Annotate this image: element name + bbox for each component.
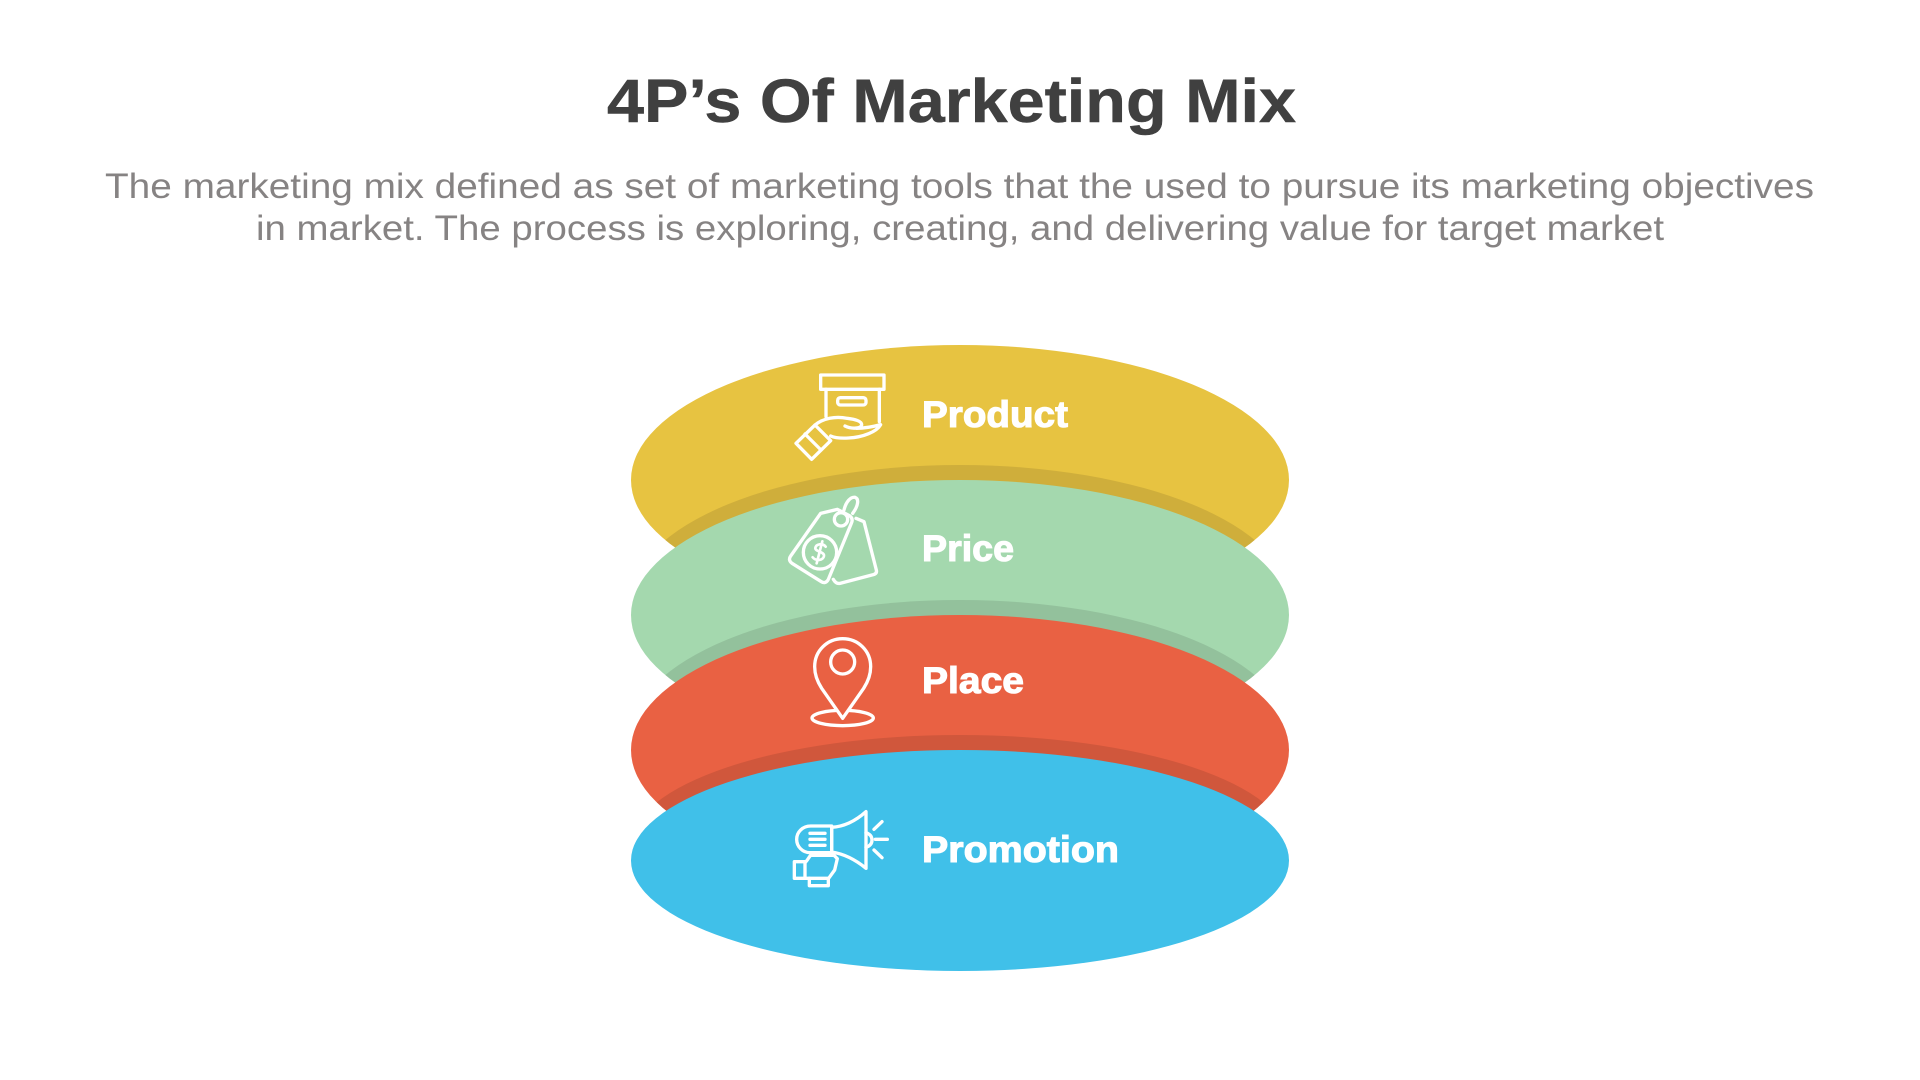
subtitle text block: The marketing mix defined as set of marketing tools that the used to pursue its marketing objectives (105, 167, 1814, 206)
layer: product (631, 345, 1289, 548)
icon: box in hand (796, 375, 884, 459)
label: place: Place (922, 660, 1024, 701)
icon: price tags (790, 497, 877, 583)
icon: megaphone in hand (794, 812, 887, 886)
layer: price (631, 480, 1289, 682)
label: product: Product (922, 394, 1068, 435)
subtitle text block (105, 167, 1814, 248)
label: price: Price (922, 528, 1014, 569)
icon: location pin (812, 639, 873, 726)
subtitle text block: in market. The process is exploring, creating, and delivering value for target market (256, 209, 1664, 248)
layer: promotion (631, 750, 1289, 971)
label: promotion: Promotion (922, 829, 1119, 870)
layer: place (631, 615, 1289, 811)
title: 4P’s Of Marketing Mix (607, 67, 1296, 135)
